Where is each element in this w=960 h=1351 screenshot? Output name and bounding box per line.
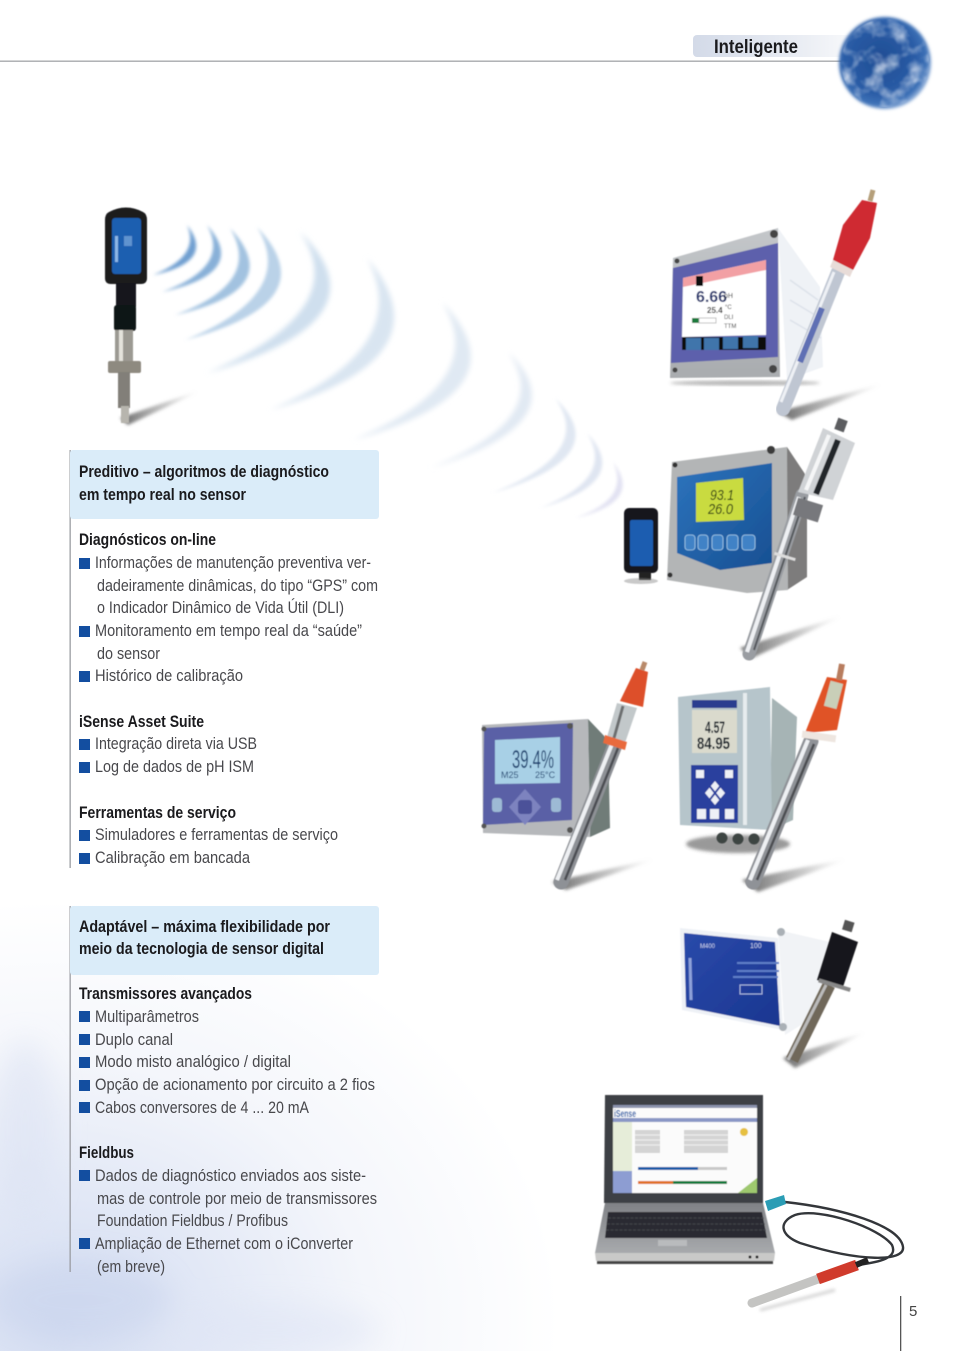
header band: [0, 35, 853, 62]
text block: transmissores avançados: Transmissores avançados: [79, 985, 252, 1003]
black sensor: [783, 920, 864, 1068]
transmitter with touchscreen: [670, 228, 823, 386]
text block: ferramentas de serviço: Ferramentas de serviço: [79, 804, 236, 822]
text block: transmissores avançados: [79, 985, 375, 1117]
text block: diagnósticos on-line: Histórico de calibração: [95, 666, 243, 685]
heading box: preditivo: Preditivo – algoritmos de diagnóstico: [79, 463, 329, 481]
text block: transmissores avançados: Opção de acionamento por circuito a 2 fios: [95, 1075, 375, 1094]
icon: globe: [839, 17, 931, 109]
transmitter with touchscreen: 6.66: [696, 289, 727, 306]
USB cable and sensor: [752, 1195, 903, 1310]
transmitter with LCD: 26.0: [707, 501, 734, 518]
text block: diagnósticos on-line: Informações de manutenção preventiva ver-: [95, 553, 371, 572]
transmitter blue box: 100: [750, 943, 762, 950]
transmitter grey with keypad: 84.95: [697, 734, 730, 753]
background glow: [0, 880, 560, 1351]
transmitter with LCD: [667, 446, 807, 593]
transmitter with touchscreen: 25.4: [707, 306, 723, 315]
text block: diagnósticos on-line: dadeiramente dinâmicas, do tipo “GPS” com: [97, 576, 378, 595]
small head module: [624, 508, 658, 584]
text block: ferramentas de serviço: Simuladores e ferramentas de serviço: [95, 825, 338, 844]
heading box: adaptável: meio da tecnologia de sensor digital: [79, 940, 324, 958]
transmitter blue with 39.4 display: M25: [501, 770, 519, 780]
heading box: adaptável: Adaptável – máxima flexibilidade por: [79, 918, 331, 936]
transmitter with touchscreen: pH: [724, 293, 733, 300]
text block: diagnósticos on-line: o Indicador Dinâmico de Vida Útil (DLI): [97, 598, 344, 617]
text block: transmissores avançados: Cabos conversores de 4 ... 20 mA: [95, 1098, 310, 1117]
transmitter blue with 39.4 display: 25°C: [535, 770, 556, 780]
pH sensor red: [778, 190, 880, 420]
text block: transmissores avançados: Multiparâmetros: [95, 1007, 199, 1026]
heading box: adaptável: [70, 906, 379, 975]
text block: diagnósticos on-line: Monitoramento em tempo real da “saúde”: [95, 621, 362, 640]
page number: [900, 1296, 917, 1351]
text block: diagnósticos on-line: do sensor: [97, 644, 160, 663]
page number: 5: [909, 1303, 917, 1320]
title pill: [693, 35, 853, 57]
panel: preditivo: [70, 450, 379, 868]
transmitter blue box: M400: [700, 944, 716, 950]
text block: iSense Asset Suite: Integração direta via USB: [95, 734, 257, 753]
transmitter with touchscreen: TTM: [724, 324, 736, 330]
text block: fieldbus: (em breve): [97, 1257, 165, 1276]
transmitter blue with 39.4 display: [482, 719, 610, 837]
screen content: iSense: [614, 1109, 636, 1120]
heading box: preditivo: [70, 450, 379, 519]
transmitter grey with keypad: [678, 687, 797, 853]
text block: fieldbus: [79, 1144, 377, 1276]
signal waves: [153, 225, 623, 518]
transmitter with touchscreen: DLI: [724, 315, 734, 321]
pH sensor orange: [552, 662, 652, 890]
transmitter blue with 39.4 display: 39.4%: [512, 746, 554, 774]
transmitter blue box: [680, 928, 830, 1035]
transmitter with LCD: 93.1: [710, 487, 734, 504]
text block: diagnósticos on-line: [79, 531, 378, 685]
text block: transmissores avançados: Modo misto analógico / digital: [95, 1052, 291, 1071]
sensor with wireless head: [105, 208, 197, 425]
transmitter grey with keypad: 4.57: [705, 718, 725, 737]
steel sensor: [740, 418, 855, 658]
text block: iSense Asset Suite: Log de dados de pH ISM: [95, 757, 254, 776]
text block: fieldbus: Ampliação de Ethernet com o iConverter: [95, 1234, 353, 1253]
text block: ferramentas de serviço: [79, 804, 338, 867]
text block: fieldbus: Foundation Fieldbus / Profibus: [97, 1211, 288, 1230]
text block: diagnósticos on-line: Diagnósticos on-line: [79, 531, 216, 549]
text block: iSense Asset Suite: [79, 713, 257, 776]
text block: fieldbus: mas de controle por meio de transmissores: [97, 1189, 377, 1208]
text block: iSense Asset Suite: iSense Asset Suite: [79, 713, 204, 731]
text block: transmissores avançados: Duplo canal: [95, 1030, 173, 1049]
panel: adaptável: [70, 906, 379, 1276]
text block: fieldbus: Dados de diagnóstico enviados aos siste-: [95, 1166, 366, 1185]
title: Inteligente: [714, 37, 798, 58]
pH sensor orange with display: [742, 664, 847, 892]
text block: fieldbus: Fieldbus: [79, 1144, 134, 1162]
laptop: [595, 1095, 775, 1264]
transmitter with touchscreen: °C: [725, 305, 732, 311]
heading box: preditivo: em tempo real no sensor: [79, 486, 246, 504]
screen content: [613, 1105, 757, 1193]
text block: ferramentas de serviço: Calibração em bancada: [95, 848, 250, 867]
